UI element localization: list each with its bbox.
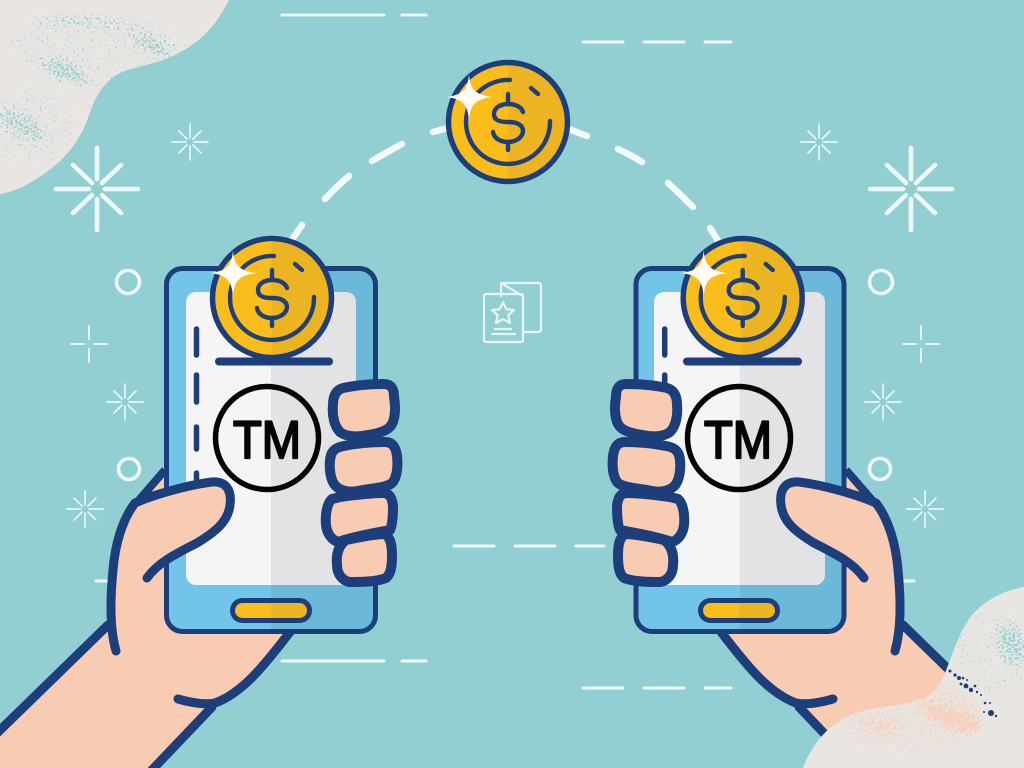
left phone dashed line: [194, 329, 199, 490]
right hand fingers: [613, 384, 684, 582]
coin: right phone: [681, 238, 802, 358]
right phone: [636, 268, 844, 632]
right phone shelf line: [687, 358, 798, 366]
decorative blob: top left: [0, 0, 229, 194]
left phone shelf line: [219, 358, 329, 366]
right thumb: [781, 482, 900, 651]
icon: award document: [484, 283, 541, 342]
left hand fingers: [326, 384, 397, 582]
right phone dashed line: [662, 329, 667, 402]
sparkles left: [56, 124, 208, 527]
navy speckles along the arm outline: [948, 670, 997, 717]
right phone home button: [700, 600, 778, 620]
TM badge left: [216, 386, 318, 490]
sparkles right: [801, 124, 952, 527]
left hand, back of palm and arm: [0, 468, 300, 768]
dashed transfer arc: [291, 127, 720, 244]
right hand, back of palm and arm: [711, 468, 1021, 768]
decorative blob: bottom right: [803, 587, 1024, 768]
TM badge left: TM: [233, 411, 301, 470]
coin: top centre: [446, 62, 568, 182]
coin: left phone: [210, 238, 332, 358]
left phone screen: [186, 292, 356, 585]
right phone screen: [654, 292, 825, 585]
TM badge right: TM: [704, 411, 772, 470]
left thumb: [111, 482, 230, 651]
decorative dashes: [96, 15, 914, 688]
TM badge right: [688, 386, 790, 490]
left phone home button: [232, 600, 310, 620]
left phone: [166, 268, 376, 632]
